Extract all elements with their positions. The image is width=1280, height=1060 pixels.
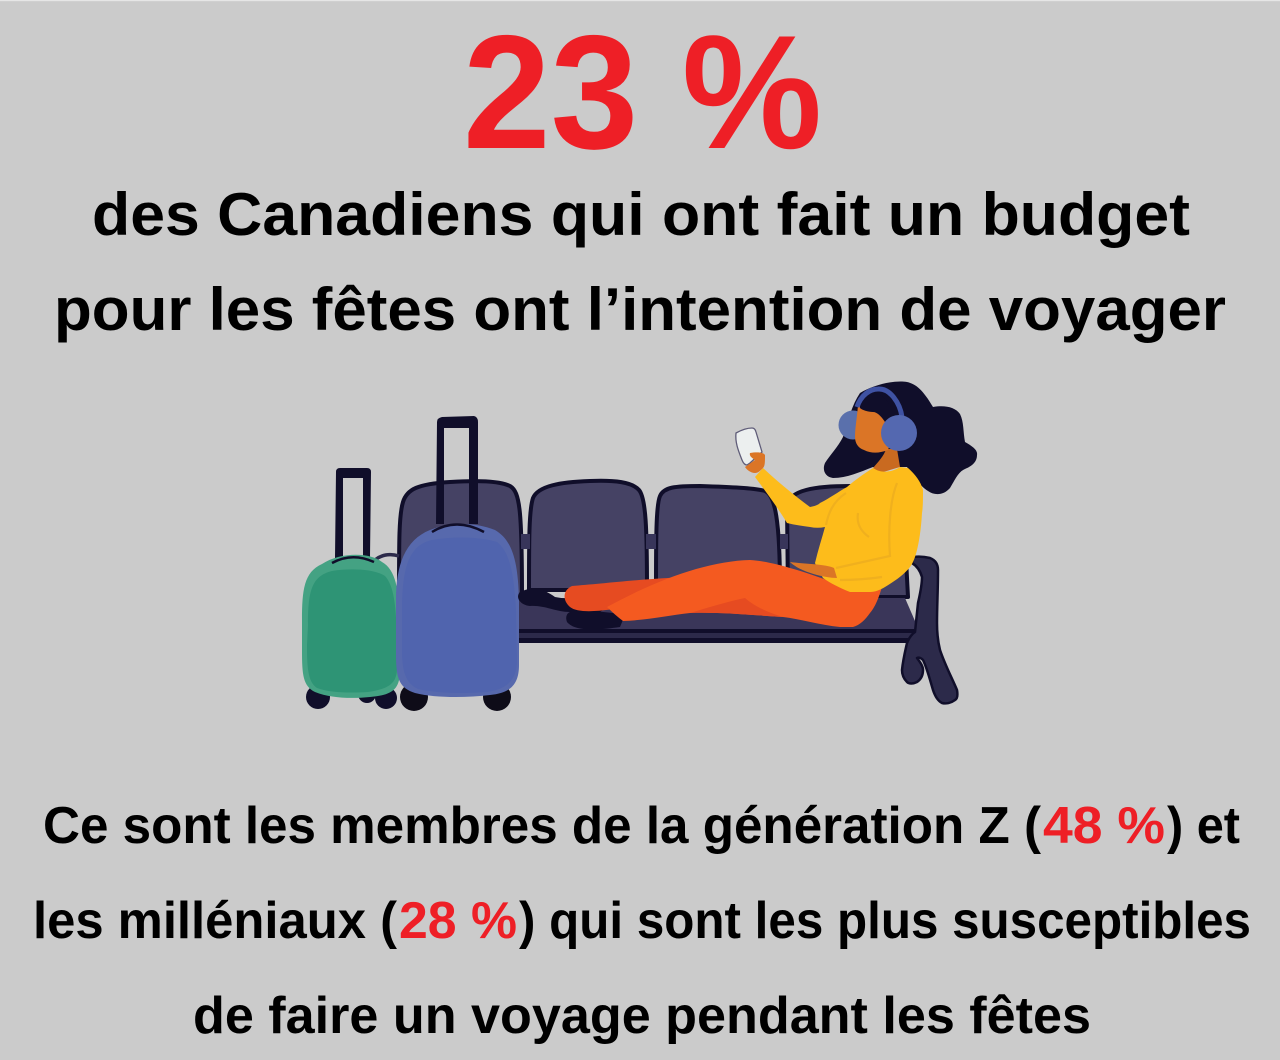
hand with phone — [745, 452, 765, 473]
bench — [375, 481, 957, 703]
phone — [736, 428, 762, 465]
neck — [873, 449, 900, 473]
line 1 with 48 %: Ce sont les membres de la génération Z ( — [43, 797, 1042, 855]
line 2 with 28 %: ) qui sont les plus susceptibles — [519, 892, 1251, 950]
bench rail — [518, 629, 917, 643]
headband — [857, 389, 902, 417]
illustration: traveller waiting on airport bench — [302, 381, 977, 711]
headline: 23 %: 23 % — [463, 2, 822, 183]
green suitcase — [302, 468, 400, 709]
line 3: de faire un voyage pendant les fêtes — [193, 987, 1091, 1045]
seat base — [518, 598, 918, 632]
sweater folds — [826, 483, 897, 580]
line 1 with 48 %: 48 % — [1043, 797, 1165, 855]
legs — [518, 589, 610, 612]
hand on lap — [790, 562, 837, 578]
left ear cup — [838, 410, 868, 440]
seat backs — [399, 481, 908, 600]
line 2 with 28 %: les milléniaux ( — [33, 892, 398, 950]
seat connectors — [521, 534, 788, 549]
bench leg and armrest — [902, 557, 957, 703]
face — [855, 400, 897, 453]
subtitle: des Canadiens qui ont fait un budget — [92, 181, 1190, 248]
sweater — [755, 467, 923, 592]
hair fringe — [860, 395, 895, 422]
blue suitcase — [396, 416, 519, 711]
line 1 with 48 %: ) et — [1167, 797, 1240, 855]
subtitle — [54, 181, 1226, 343]
subtitle: pour les fêtes ont l’intention de voyager — [54, 276, 1226, 343]
hair — [824, 381, 977, 494]
left armrest arc — [375, 555, 399, 560]
closing text block — [33, 797, 1251, 1045]
right ear cup — [881, 415, 917, 451]
line 2 with 28 % — [33, 892, 1251, 950]
line 2 with 28 %: 28 % — [399, 892, 517, 950]
woman with headphones and phone — [518, 381, 977, 629]
